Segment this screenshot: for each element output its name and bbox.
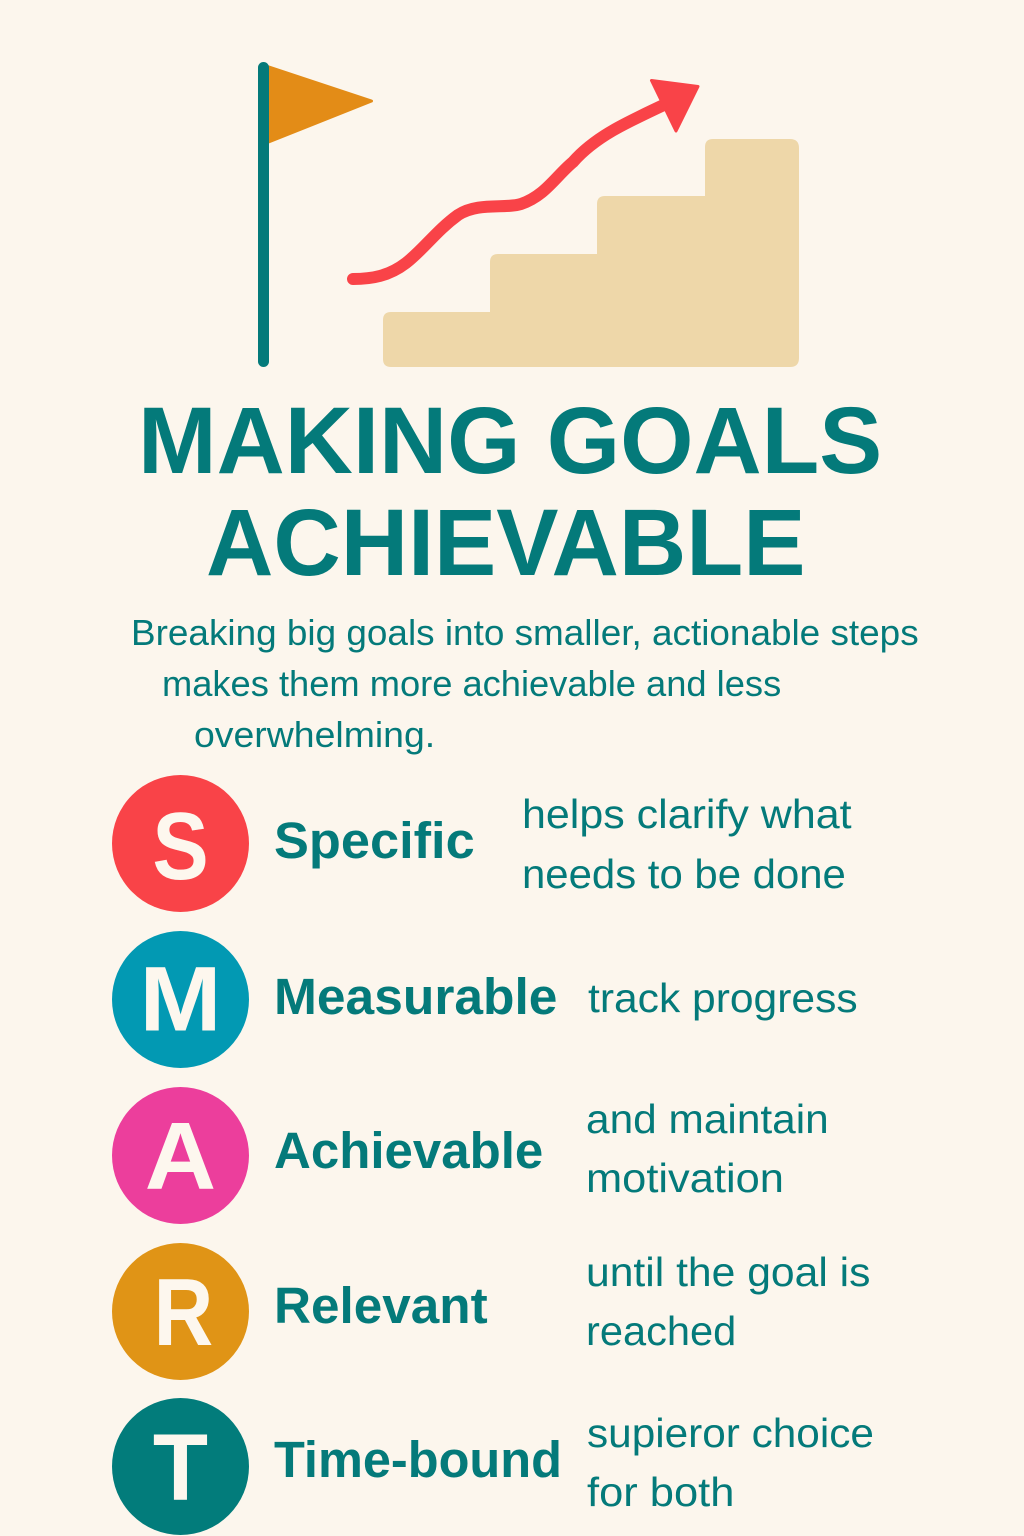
label: Measurable: Measurable [274,968,557,1025]
description: supieror choice [587,1410,874,1456]
icon: circle A [112,1087,249,1224]
description: helps clarify what [522,791,852,837]
label: Relevant: Relevant [274,1277,488,1334]
description [587,1410,874,1515]
description: for both [587,1469,734,1515]
title [138,388,882,596]
row: Relevant [112,1243,870,1380]
title: ACHIEVABLE [206,490,806,596]
description [586,1096,829,1201]
row: Measurable [112,931,858,1068]
icon: circle M [112,931,249,1068]
description [522,791,852,897]
icon: arrow head [652,80,698,131]
label: Achievable: Achievable [274,1122,543,1179]
icon: circle S [112,775,249,912]
icon: circle R [112,1243,249,1380]
intro text: Breaking big goals into smaller, actionable steps [131,612,919,653]
icon: circle A: A [145,1103,216,1210]
description: until the goal is [586,1249,870,1295]
illustration: flag, arrow and stairs [258,62,799,367]
icon: growth arrow line [353,103,668,279]
row: Achievable [112,1087,829,1224]
description: and maintain [586,1096,829,1142]
intro text [131,612,919,755]
icon: circle R: R [154,1259,213,1366]
description: motivation [586,1155,784,1201]
label: Time-bound: Time-bound [274,1431,562,1488]
icon: flag pennant [266,66,372,143]
icon: circle S: S [152,793,209,900]
description: reached [586,1308,736,1354]
description: needs to be done [522,851,846,897]
row: Specific [112,775,852,912]
title: MAKING GOALS [138,388,882,494]
description: track progress [588,975,858,1021]
icon: circle M: M [139,948,221,1050]
icon: circle T: T [153,1414,208,1520]
intro text: makes them more achievable and less [162,663,781,704]
icon: flag pole [258,62,269,367]
icon: circle T [112,1398,249,1535]
label: Specific: Specific [274,812,475,869]
intro text: overwhelming. [194,714,435,755]
description [586,1249,870,1354]
row: Time-bound [112,1398,874,1535]
icon: stairs [383,139,799,367]
